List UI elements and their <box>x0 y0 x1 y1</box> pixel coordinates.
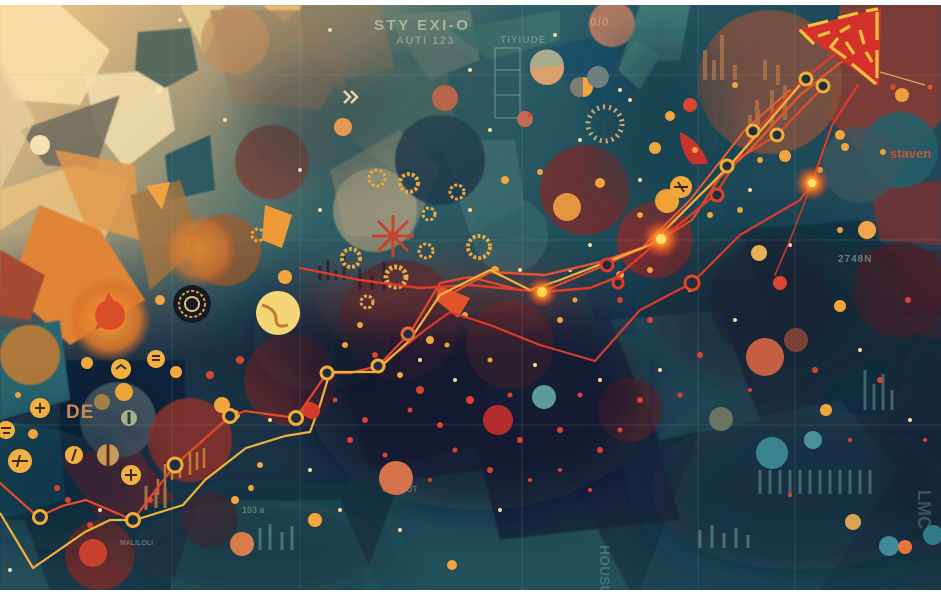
panel: warm glow top-left <box>0 0 300 265</box>
icon: red starburst <box>372 215 414 257</box>
highlighted spark nodes <box>526 165 830 308</box>
panel: lower dark field <box>0 230 941 590</box>
chart markers <box>34 73 829 526</box>
text: faded headings: TIYIUDE <box>500 35 546 46</box>
text: faded headings: STY EXI-O <box>374 17 470 34</box>
text: faded headings: staven <box>890 146 931 161</box>
text: faded headings: 0/0 <box>590 15 610 29</box>
line chart: yellow trend line <box>0 85 800 568</box>
text: faded headings: 103 a <box>242 505 266 515</box>
text: faded headings: MALILOLI <box>120 540 153 547</box>
bar charts <box>146 35 892 550</box>
text: faded headings: HOUSUN <box>597 545 613 605</box>
text: faded headings: 2748N <box>838 254 872 265</box>
text: faded headings: AUTI 123 <box>396 35 455 47</box>
icon: arrow head <box>797 8 932 90</box>
scaffold diagram <box>495 48 520 118</box>
icon: round badges <box>0 176 767 485</box>
text: faded headings: DE <box>66 402 94 423</box>
text: faded headings: LMC <box>914 490 934 529</box>
line chart: orange-red branch lines <box>0 42 858 520</box>
icon: gears cluster <box>252 170 490 308</box>
text: faded headings: ONEL OT <box>382 485 418 494</box>
icon: chevrons <box>344 91 357 103</box>
